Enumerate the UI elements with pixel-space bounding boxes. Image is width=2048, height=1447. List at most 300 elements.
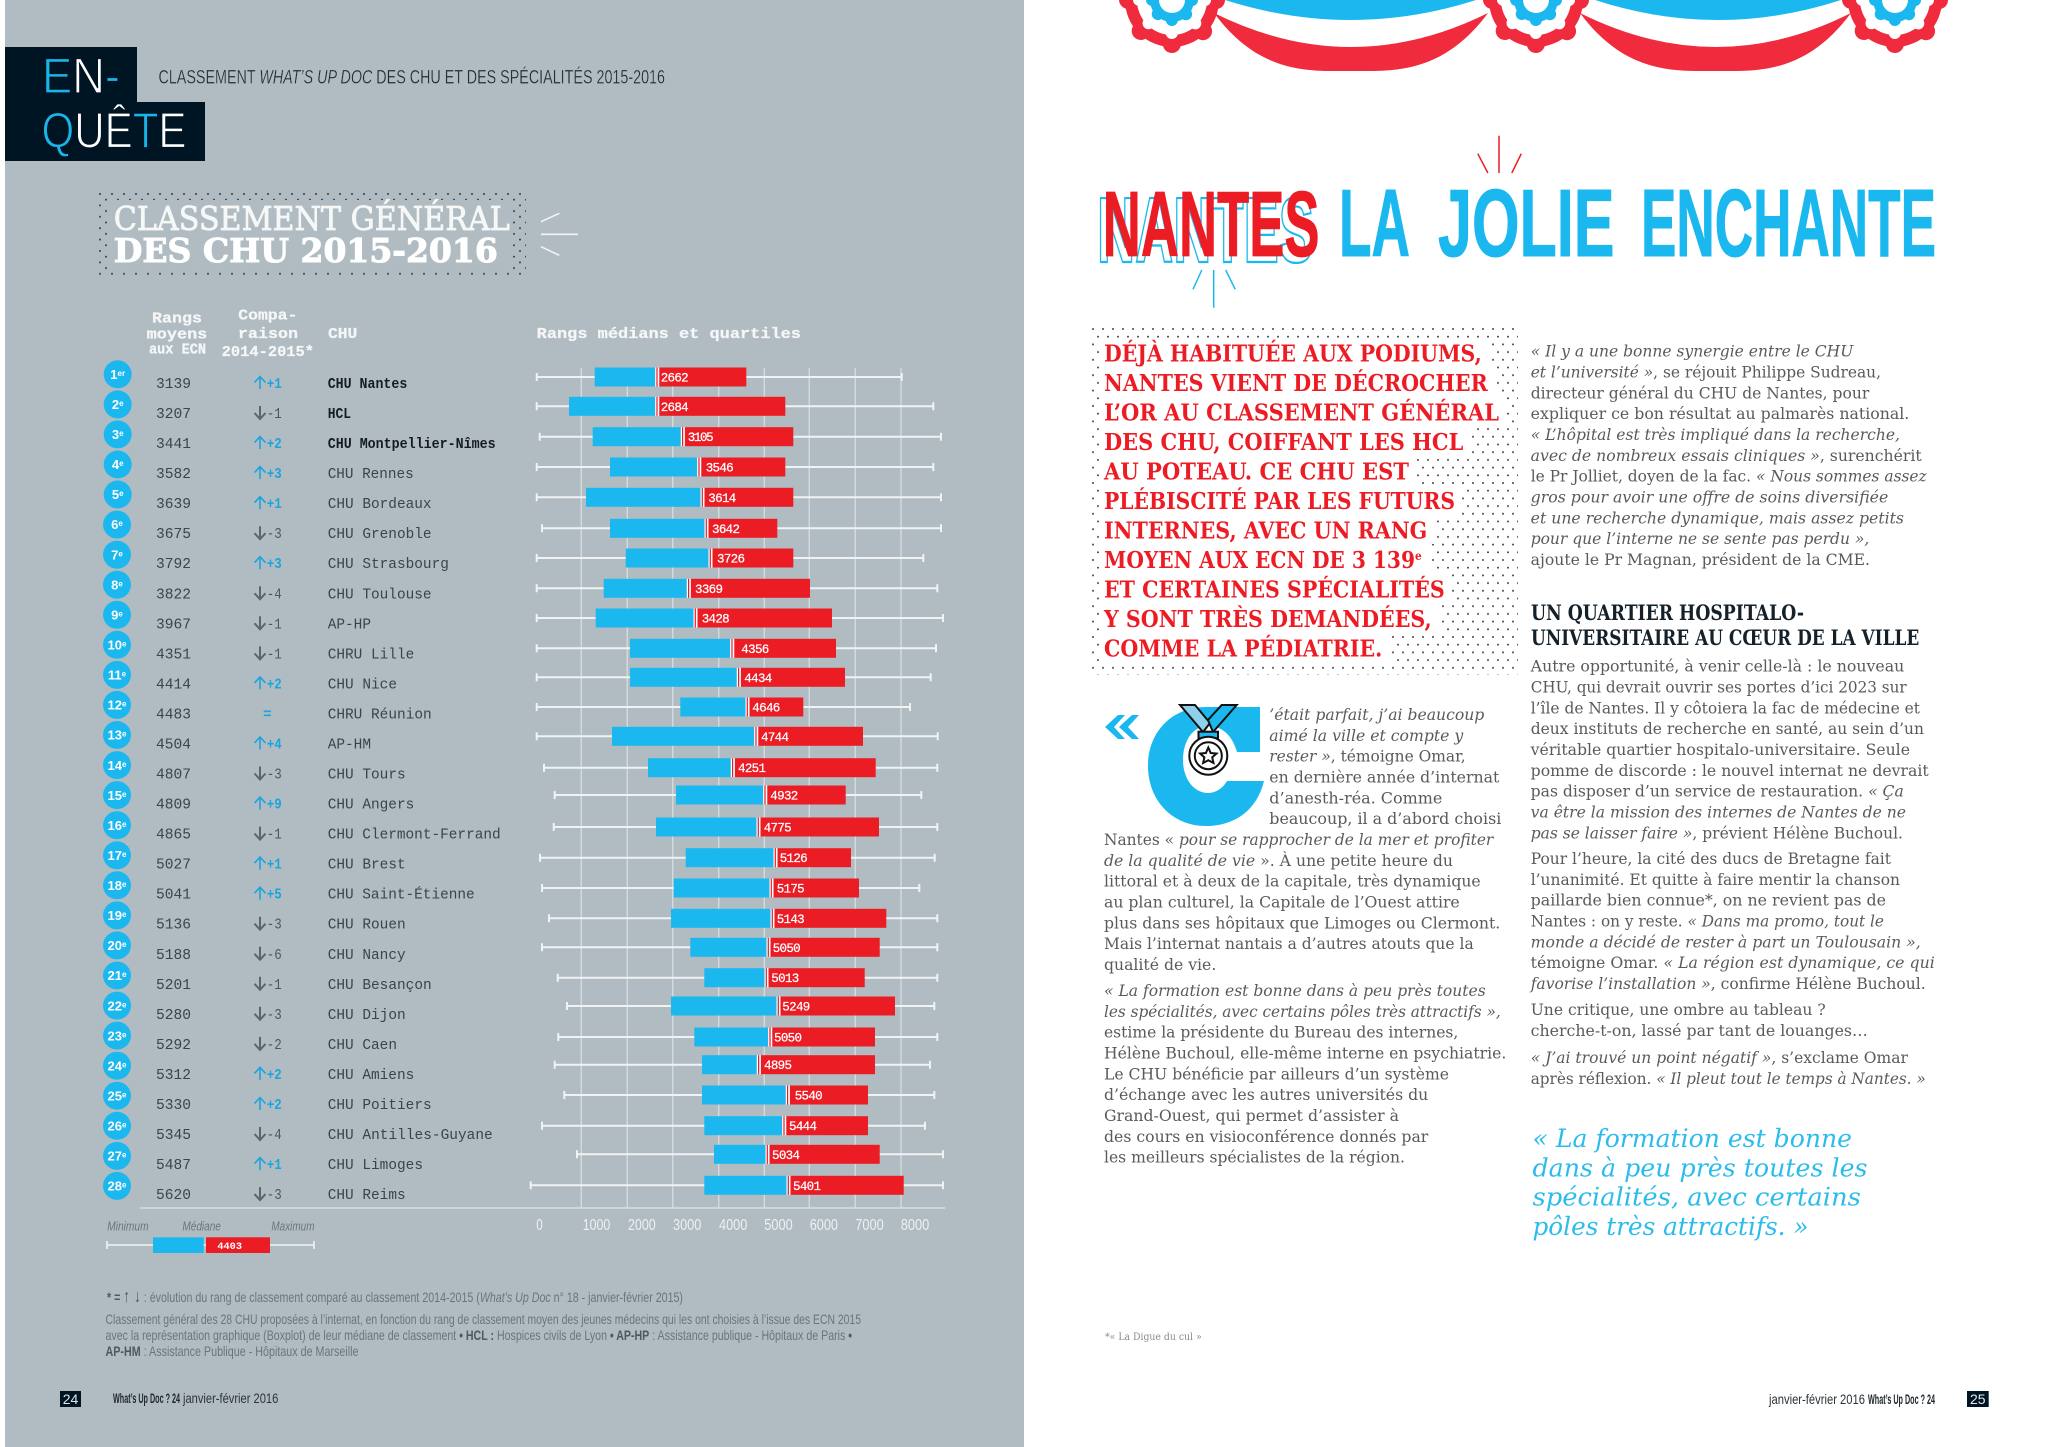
text column 2: body: après réflexion. « Il pleut tout le temps à Nantes. » [1531,1070,1926,1088]
pull quote: dans à peu près toutes les [1532,1154,1868,1183]
row 20: 20 [108,938,122,953]
footer right [1768,1391,1989,1407]
drop cap C [1148,707,1264,826]
row 7: CHU Strasbourg [328,557,449,573]
text column 2: body: Une critique, une ombre au tableau ? [1531,1001,1826,1019]
boxplot legend [107,1220,314,1253]
headline [1097,170,1936,282]
table headers: Rangs [152,310,202,327]
row 13: 13 [108,728,122,743]
row 28: 28 [108,1179,122,1194]
boxplot row 11 [537,668,931,687]
boxplot row 11: 4434 [744,672,772,686]
ranking table [103,360,501,1204]
row 16: e [122,820,127,829]
row 4: 3582 [156,467,191,483]
row 10: 4351 [156,647,191,663]
boxplot row 6: 3642 [712,523,740,537]
row 16: 4865 [156,828,191,844]
row 23: -2 [267,1038,282,1054]
text column 2: body: Autre opportunité, à venir celle-là : le nouveau [1530,658,1904,676]
row 13: e [122,730,127,739]
text column 2: quotes: « L’hôpital est très impliqué dans la recherche, [1531,426,1900,444]
row 6: 6 [111,517,118,532]
row 2 [104,390,351,423]
row 5: +1 [267,497,282,513]
row 11: 4414 [156,677,191,693]
boxplot row 17: 5126 [780,852,808,866]
row 1: CHU Nantes [328,377,407,393]
axis tick labels: 4000 [719,1217,748,1234]
text column 2: body [1530,658,1935,1088]
row 2: 3207 [156,407,191,423]
text column 2: body: paillarde bien connue*, on ne revient pas de [1531,892,1886,910]
row 3 [104,420,496,453]
text column 2: quotes: expliquer ce bon résultat au palmarès national. [1531,405,1909,423]
row 24 [103,1052,414,1084]
row 11 [103,661,397,693]
row 4: 4 [112,457,119,472]
row 22: e [122,1000,127,1009]
footer left: janvier-février 2016 [182,1390,278,1406]
boxplot chart [140,368,945,1234]
row 17: 17 [108,848,122,863]
boxplot row 20 [542,938,937,957]
row 27: +1 [267,1158,282,1174]
row 9: e [118,610,123,618]
section tag: enquête [5,47,205,161]
row 7: 7 [111,547,118,562]
row 14: 4807 [156,768,191,784]
row 8: CHU Toulouse [328,587,432,603]
boxplot row 5 [537,488,941,507]
row 26: e [122,1120,127,1130]
row 1: er [118,369,125,378]
row 11: e [122,670,127,679]
row 17: +1 [267,858,282,874]
boxplot row 16: 4775 [764,822,792,836]
text column 2: quotes [1531,343,1928,569]
row 15 [103,781,414,814]
text column 2: quotes: gros pour avoir une offre de soins diversifiée [1531,488,1888,506]
row 22: 22 [108,998,122,1013]
footnotes [106,1286,861,1359]
boxplot row 21 [558,968,937,987]
row 14 [103,751,406,784]
intro block: COMME LA PÉDIATRIE. [1104,636,1382,663]
row 24: CHU Amiens [328,1068,414,1084]
row 12: CHRU Réunion [328,707,432,723]
row 16 [103,811,501,844]
row 9: 9 [111,608,118,622]
intro block: L’OR AU CLASSEMENT GÉNÉRAL [1104,400,1499,427]
row 5: 3639 [156,497,191,513]
boxplot row 23 [558,1028,937,1046]
icon: medal [1180,705,1237,775]
row 25: +2 [267,1098,282,1114]
text column 2: body: « J’ai trouvé un point négatif », s’exclame Omar [1531,1049,1908,1067]
row 6 [103,511,432,543]
text column 1: estime la présidente du Bureau des internes, [1104,1024,1458,1042]
row 19: e [122,910,127,919]
boxplot row 14 [544,758,937,777]
text column 1: au plan culturel, la Capitale de l’Ouest attire [1104,894,1460,912]
pull quote [1532,1124,1868,1241]
row 17: e [122,850,127,859]
row 2: -1 [267,407,282,423]
boxplot row 15 [555,786,921,804]
row 13 [103,721,371,754]
row 5: e [119,489,124,498]
axis tick labels: 3000 [673,1217,702,1234]
row 22: CHU Dijon [328,1008,406,1024]
row 3: 3 [112,427,119,442]
bunting decoration [1125,0,1942,71]
row 26: CHU Antilles-Guyane [328,1128,493,1144]
row 27: e [122,1151,127,1160]
row 2: 2 [112,397,119,412]
text column 2: body: CHU, qui devrait ouvrir ses portes d’ici 2023 sur [1531,678,1907,696]
text column 1: Nantes « pour se rapprocher de la mer et profiter [1104,831,1495,849]
row 1: +1 [267,377,282,393]
row 16: 16 [108,818,122,833]
subheading: UN QUARTIER HOSPITALO- [1531,600,1804,625]
intro block: Y SONT TRÈS DEMANDÉES, [1103,606,1432,633]
row 9 [103,601,371,633]
text column 1: les meilleurs spécialistes de la région. [1104,1149,1405,1167]
text column 1: beaucoup, il a d’abord choisi [1269,810,1501,828]
boxplot row 18: 5175 [777,882,805,896]
text column 1: littoral et à deux de la capitale, très dynamique [1104,873,1481,891]
boxplot row 17 [540,848,935,867]
headline: JOLIE [1438,170,1614,277]
boxplot row 22: 5249 [782,1000,810,1014]
text column 2: body: favorise l’installation », confirme Hélène Buchoul. [1530,975,1926,993]
boxplot row 25: 5540 [795,1090,823,1104]
text column 2: body: Nantes : on y reste. « Dans ma promo, tout le [1531,912,1884,930]
text column 1: des cours en visioconférence donnés par [1104,1128,1429,1146]
table headers: raison [238,326,298,343]
boxplot row 22 [567,996,934,1016]
row 3: e [119,429,124,438]
row 15: CHU Angers [328,798,414,814]
text column 1: en dernière année d’internat [1269,768,1500,786]
text column 2: quotes: « Il y a une bonne synergie entre le CHU [1531,343,1854,361]
row 6: CHU Grenoble [328,527,432,543]
text column 1: ’était parfait, j’ai beaucoup [1269,706,1484,724]
row 17: 5027 [156,858,191,874]
intro block: PLÉBISCITÉ PAR LES FUTURS [1104,488,1455,515]
boxplot row 6 [542,519,941,538]
row 18: e [122,880,127,889]
text column 1: qualité de vie. [1104,956,1216,974]
boxplot row 10 [537,639,936,658]
text column 1: « La formation est bonne dans à peu près toutes [1104,982,1486,1000]
row 20: e [122,940,127,949]
boxplot row 13 [537,727,938,746]
intro block: e [1415,549,1422,563]
boxplot row 24 [555,1055,930,1074]
row 20 [103,931,406,964]
text column 1 [1104,706,1506,1167]
row 14: CHU Tours [328,768,406,784]
row 8: 8 [111,577,118,592]
row 3: +2 [267,437,282,453]
boxplot row 9 [537,608,943,628]
row 7 [103,541,449,573]
axis tick labels [536,1217,930,1234]
boxplot row 28: 5401 [793,1180,821,1194]
boxplot row 8: 3369 [695,583,723,597]
row 1: 3139 [156,377,191,393]
row 5: CHU Bordeaux [328,497,432,513]
row 4: e [119,459,124,468]
panel: left page [5,0,1024,1447]
text column 1: aimé la ville et compte y [1269,727,1464,745]
text column 2: quotes: ajoute le Pr Magnan, président de la CME. [1531,551,1870,569]
text column 2: body: véritable quartier hospitalo-universitaire. Seule [1530,741,1910,759]
pull quote: pôles très attractifs. » [1532,1212,1808,1241]
row 28: CHU Reims [328,1188,406,1204]
row 26: 26 [108,1118,122,1134]
table headers [147,307,801,361]
row 23: 23 [108,1028,122,1043]
icon: opening guillemets [1105,715,1139,739]
boxplot row 4 [537,458,933,476]
row 15: 15 [108,788,122,803]
row 3: 3441 [156,437,191,453]
row 5 [104,480,432,513]
text column 2: body: témoigne Omar. « La région est dynamique, ce qui [1531,954,1935,972]
row 19: -3 [267,918,282,934]
page footnote: *« La Digue du cul » [1105,1331,1202,1343]
text column 2: body: cherche-t-on, lassé par tant de louanges… [1531,1022,1868,1040]
row 28: e [122,1181,127,1190]
boxplot row 9: 3428 [702,612,730,626]
row 25: 5330 [156,1098,191,1114]
text column 2: body: monde a décidé de rester à part un Toulousain », [1531,933,1921,951]
row 14: 14 [108,758,122,773]
boxplot legend: Médiane [182,1220,221,1234]
row 26: -4 [267,1128,282,1144]
table headers: aux ECN [149,341,206,358]
intro block: DÉJÀ HABITUÉE AUX PODIUMS, [1104,341,1482,368]
intro block: MOYEN AUX ECN DE 3 139 [1104,547,1459,574]
row 13: +4 [267,738,282,754]
boxplot row 27: 5034 [772,1149,800,1163]
table headers: 2014-2015* [222,344,314,361]
headline rays blue [1193,270,1235,308]
text column 2: quotes: le Pr Jolliet, doyen de la fac. « Nous sommes assez [1531,468,1928,486]
boxplot row 14: 4251 [738,762,766,776]
table headers: Compa- [238,307,297,324]
chart title: CLASSEMENT GÉNÉRAL [114,198,510,238]
row 1 [104,360,407,393]
panel: right page [1024,0,2048,1447]
row 18: 18 [108,878,122,893]
section tag: enquête: EN- [42,48,120,104]
section tag: enquête: QUÊTE [42,103,186,159]
row 25 [103,1082,432,1114]
row 6: e [118,519,123,528]
boxplot row 19 [549,909,937,928]
row 27: 5487 [156,1158,191,1174]
intro block: INTERNES, AVEC UN RANG [1104,518,1427,545]
axis tick labels: 6000 [810,1217,838,1234]
boxplot legend: 4403 [217,1241,242,1253]
row 26 [103,1112,493,1144]
row 7: +3 [267,557,282,573]
row 4 [104,450,414,483]
row 8: e [118,579,123,588]
text column 1: d’échange avec les autres universités du [1104,1086,1428,1104]
text column 2: quotes: pour que l’interne ne se sente pas perdu », [1531,530,1869,548]
row 25: e [122,1090,127,1099]
text column 1: Hélène Buchoul, elle-même interne en psychiatrie. [1104,1044,1506,1062]
boxplot row 10: 4356 [741,643,769,657]
row 4: CHU Rennes [328,467,414,483]
footer left [60,1390,278,1407]
text column 2: body: pomme de discorde : le nouvel internat ne devrait [1531,762,1929,780]
subheading [1531,600,1919,650]
boxplot row 19: 5143 [777,913,805,927]
row 10: 10 [108,638,122,652]
row 3: CHU Montpellier-Nîmes [328,437,496,453]
row 18 [103,871,475,904]
row 22: -3 [267,1008,282,1024]
boxplot row 1: 2662 [661,372,689,386]
boxplot row 16 [554,818,937,836]
row 1: 1 [110,367,118,382]
row 10: e [122,640,127,648]
row 20: 5188 [156,948,191,964]
boxplot row 3 [540,427,941,446]
row 18: CHU Saint-Étienne [328,886,475,904]
boxplot row 28 [531,1176,943,1195]
row 19: CHU Rouen [328,918,406,934]
row 23: e [122,1030,127,1039]
text column 1: Grand-Ouest, qui permet d’assister à [1104,1107,1399,1125]
row 7: 3792 [156,557,191,573]
chart title [98,192,526,278]
footnotes: * = ↑ ↓ : évolution du rang de classement comparé au classement 2014-2015 (What’s Up Doc n° 18 - janvier-février 2015) [107,1286,683,1306]
row 13: 4504 [156,738,191,754]
row 14: -3 [267,768,282,784]
row 21: e [122,970,127,979]
text column 2: quotes: et l’université », se réjouit Philippe Sudreau, [1531,364,1881,382]
text column 2: quotes: directeur général du CHU de Nantes, pour [1531,384,1870,402]
footer left: What’s Up Doc ? 24 [113,1390,180,1406]
row 28: -3 [267,1188,282,1204]
boxplot row 5: 3614 [708,492,736,506]
footnotes: Classement général des 28 CHU proposées à l’internat, en fonction du rang de classement moyen des jeunes médecins qui les ont choisies à l’issue des ECN 2015 [106,1311,861,1327]
footer right: 25 [1970,1391,1986,1407]
row 2: HCL [328,407,351,423]
text column 2: quotes: avec de nombreux essais cliniques », surenchérit [1531,447,1922,465]
axis tick labels: 0 [536,1217,543,1234]
row 21: CHU Besançon [328,978,432,994]
boxplot row 18 [542,878,919,898]
text column 1: Le CHU bénéficie par ailleurs d’un système [1104,1065,1449,1083]
row 28: 5620 [156,1188,191,1204]
row 24: +2 [267,1068,282,1084]
row 10 [103,631,414,663]
boxplot row 1 [537,368,902,386]
boxplot legend: Maximum [271,1220,314,1234]
row 25: CHU Poitiers [328,1098,432,1114]
boxplot row 7 [537,548,923,568]
icon: title rays [541,213,578,255]
text column 2: body: l’île de Nantes. Il y côtoiera la fac de médecine et [1531,699,1921,717]
row 15: e [122,790,127,799]
row 26: 5345 [156,1128,191,1144]
pull quote: spécialités, avec certains [1532,1182,1861,1212]
boxplot row 27 [577,1145,943,1164]
row 27 [103,1142,423,1174]
row 16: -1 [267,828,282,844]
boxplot row 23: 5050 [774,1032,802,1046]
row 5: 5 [112,487,119,502]
boxplot row 20: 5050 [773,942,801,956]
footnotes: avec la représentation graphique (Boxplot) de leur médiane de classement • HCL : Hospices civils de Lyon • AP-HP : Assistance publique - Hôpitaux de Paris • [106,1327,852,1343]
axis tick labels: 8000 [901,1217,930,1234]
axis tick labels: 2000 [628,1217,656,1234]
row 24: 5312 [156,1068,191,1084]
boxplot row 2: 2684 [661,401,689,415]
headline: LA [1339,170,1410,277]
boxplot row 8 [537,579,937,598]
row 9: AP-HP [328,617,371,633]
row 13: AP-HM [328,738,371,754]
intro block: ET CERTAINES SPÉCIALITÉS [1104,577,1445,604]
row 27: CHU Limoges [328,1158,423,1174]
row 25: 25 [108,1088,122,1103]
boxplot row 4: 3546 [706,462,734,476]
text column 2: body: va être la mission des internes de Nantes de ne [1531,804,1906,822]
text column 2: body: deux instituts de recherche en santé, au sein d’un [1531,720,1924,738]
text column 2: body: l’unanimité. Et quitte à faire mentir la chanson [1531,871,1900,889]
row 21 [103,962,432,994]
row 12: = [263,707,272,723]
footer right: janvier-février 2016 [1768,1391,1865,1407]
row 8: 3822 [156,587,191,603]
row 18: 5041 [156,888,191,904]
row 14: e [122,760,127,769]
boxplot row 21: 5013 [771,972,799,986]
row 21: -1 [267,978,282,994]
row 18: +5 [267,888,282,904]
row 10: CHRU Lille [328,647,414,663]
boxplot row 15: 4932 [770,790,798,804]
row 9: -1 [267,617,282,633]
row 28 [103,1172,406,1204]
row 23 [103,1022,397,1054]
row 9: 3967 [156,617,191,633]
boxplot row 2 [537,397,933,416]
pull quote: « La formation est bonne [1532,1124,1852,1153]
row 17: CHU Brest [328,858,406,874]
row 17 [103,841,406,874]
table headers: Rangs médians et quartiles [537,326,801,343]
subheading: UNIVERSITAIRE AU CŒUR DE LA VILLE [1531,625,1919,650]
boxplot row 13: 4744 [761,731,789,745]
intro block: AU POTEAU. CE CHU EST [1103,459,1409,486]
row 2: e [119,399,124,408]
row 11: CHU Nice [328,677,397,693]
header strapline: CLASSEMENT WHAT’S UP DOC DES CHU ET DES SPÉCIALITÉS 2015-2016 [158,65,665,88]
text column 2: body: pas se laisser faire », prévient Hélène Buchoul. [1531,824,1903,842]
boxplot row 24: 4895 [764,1059,792,1073]
